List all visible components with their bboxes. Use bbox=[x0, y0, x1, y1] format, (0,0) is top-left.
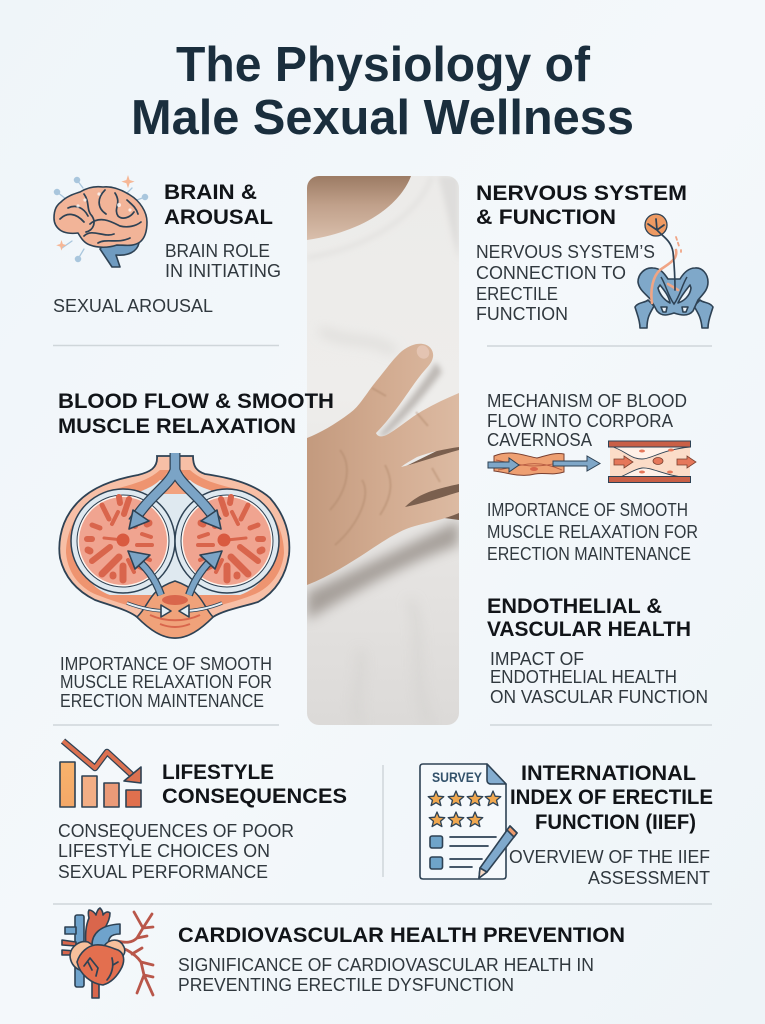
heading: FUNCTION (IIEF) bbox=[535, 810, 696, 834]
title: Male Sexual Wellness bbox=[131, 91, 634, 145]
base bulb bbox=[137, 581, 213, 638]
text block bbox=[178, 955, 594, 995]
text block: IMPACT OF bbox=[490, 649, 584, 669]
text block bbox=[476, 242, 655, 324]
femurs bbox=[635, 300, 654, 328]
text block: SEXUAL AROUSAL bbox=[53, 296, 213, 316]
text block: NERVOUS SYSTEM’S bbox=[476, 242, 655, 262]
text block bbox=[490, 649, 708, 707]
text block: LIFESTYLE CHOICES ON bbox=[58, 841, 270, 861]
pelvic ring bbox=[638, 268, 708, 315]
text block: ASSESSMENT bbox=[588, 868, 710, 888]
hand bbox=[307, 344, 459, 585]
ventricles bbox=[77, 945, 124, 985]
heading: VASCULAR HEALTH bbox=[487, 617, 691, 641]
icon: smooth muscle and blood vessel bbox=[488, 441, 696, 482]
section: blood flow and smooth muscle bbox=[58, 389, 334, 711]
text block: MUSCLE RELAXATION FOR bbox=[60, 672, 272, 692]
text block: OVERVIEW OF THE IIEF bbox=[509, 847, 710, 867]
heading: NERVOUS SYSTEM bbox=[476, 181, 687, 205]
heading bbox=[162, 760, 347, 808]
heading: & FUNCTION bbox=[476, 205, 616, 229]
icon: pelvis and nerve pathway bbox=[635, 214, 713, 328]
heading: BLOOD FLOW & SMOOTH bbox=[58, 389, 334, 413]
section: blood flow mechanism bbox=[487, 391, 698, 564]
section: nervous system bbox=[476, 181, 713, 328]
text block bbox=[487, 500, 698, 564]
heading: CONSEQUENCES bbox=[162, 784, 347, 808]
text block bbox=[60, 654, 272, 711]
heading bbox=[476, 181, 687, 229]
title: The Physiology of bbox=[176, 38, 591, 92]
icon: declining bar chart bbox=[60, 741, 141, 807]
text block bbox=[487, 391, 687, 450]
arrows: trunk forking to both chambers bbox=[133, 453, 217, 595]
heading: INDEX OF ERECTILE bbox=[510, 785, 713, 809]
heading: AROUSAL bbox=[164, 205, 273, 229]
text block: BRAIN ROLE bbox=[165, 241, 270, 261]
heading bbox=[510, 761, 713, 834]
heading: CARDIOVASCULAR HEALTH PREVENTION bbox=[178, 923, 625, 947]
heading bbox=[58, 389, 334, 438]
section: lifestyle consequences bbox=[58, 741, 347, 882]
text block: CONNECTION TO bbox=[476, 263, 626, 283]
icon: heart with vessels bbox=[62, 908, 153, 998]
heading: BRAIN & bbox=[164, 180, 257, 204]
title bbox=[131, 38, 634, 145]
section: cardiovascular health bbox=[62, 908, 625, 998]
text block bbox=[58, 821, 294, 882]
text block: MUSCLE RELAXATION FOR bbox=[487, 522, 698, 542]
text block: IMPORTANCE OF SMOOTH bbox=[60, 654, 272, 674]
neck skin bbox=[307, 176, 411, 240]
text block: ERECTION MAINTENANCE bbox=[487, 544, 691, 564]
heading bbox=[164, 180, 273, 229]
text block: MECHANISM OF BLOOD bbox=[487, 391, 687, 411]
text block: ENDOTHELIAL HEALTH bbox=[490, 667, 677, 687]
text block bbox=[509, 847, 710, 888]
text block: ERECTILE bbox=[476, 284, 558, 304]
text block: PREVENTING ERECTILE DYSFUNCTION bbox=[178, 975, 514, 995]
icon: survey clipboard and pencil: SURVEY bbox=[432, 770, 482, 785]
knuckles and tendons bbox=[330, 388, 440, 545]
fingernail bbox=[416, 345, 430, 359]
text block bbox=[53, 241, 281, 316]
pulmonary artery bbox=[92, 924, 120, 948]
icon: survey clipboard and pencil bbox=[420, 764, 517, 879]
text block: CAVERNOSA bbox=[487, 430, 592, 450]
atria bbox=[70, 940, 125, 970]
text block: SIGNIFICANCE OF CARDIOVASCULAR HEALTH IN bbox=[178, 955, 594, 975]
icon: brain bbox=[54, 175, 148, 267]
text block: FUNCTION bbox=[476, 304, 568, 324]
text block: ERECTION MAINTENANCE bbox=[60, 691, 264, 711]
text block: IMPORTANCE OF SMOOTH bbox=[487, 500, 688, 520]
section: IIEF survey bbox=[420, 761, 713, 888]
heading bbox=[487, 594, 691, 641]
diagram: corpora cavernosa cross section bbox=[59, 453, 289, 638]
heading: LIFESTYLE bbox=[162, 760, 274, 784]
heading: INTERNATIONAL bbox=[521, 761, 696, 785]
text block: ON VASCULAR FUNCTION bbox=[490, 687, 708, 707]
text block: SEXUAL PERFORMANCE bbox=[58, 862, 268, 882]
aorta bbox=[86, 908, 110, 945]
heading: ENDOTHELIAL & bbox=[487, 594, 662, 618]
hand shadow bbox=[307, 520, 459, 620]
section: brain and arousal bbox=[53, 175, 281, 316]
arterial tree bbox=[117, 912, 153, 995]
shadow between the fingers bbox=[405, 447, 459, 520]
section: endothelial and vascular health bbox=[487, 594, 708, 707]
text block: CONSEQUENCES OF POOR bbox=[58, 821, 294, 841]
central photo: hand on white t-shirt chest bbox=[307, 176, 459, 725]
text block: FLOW INTO CORPORA bbox=[487, 411, 673, 431]
heading: MUSCLE RELAXATION bbox=[58, 414, 296, 438]
text block: IN INITIATING bbox=[165, 261, 281, 281]
